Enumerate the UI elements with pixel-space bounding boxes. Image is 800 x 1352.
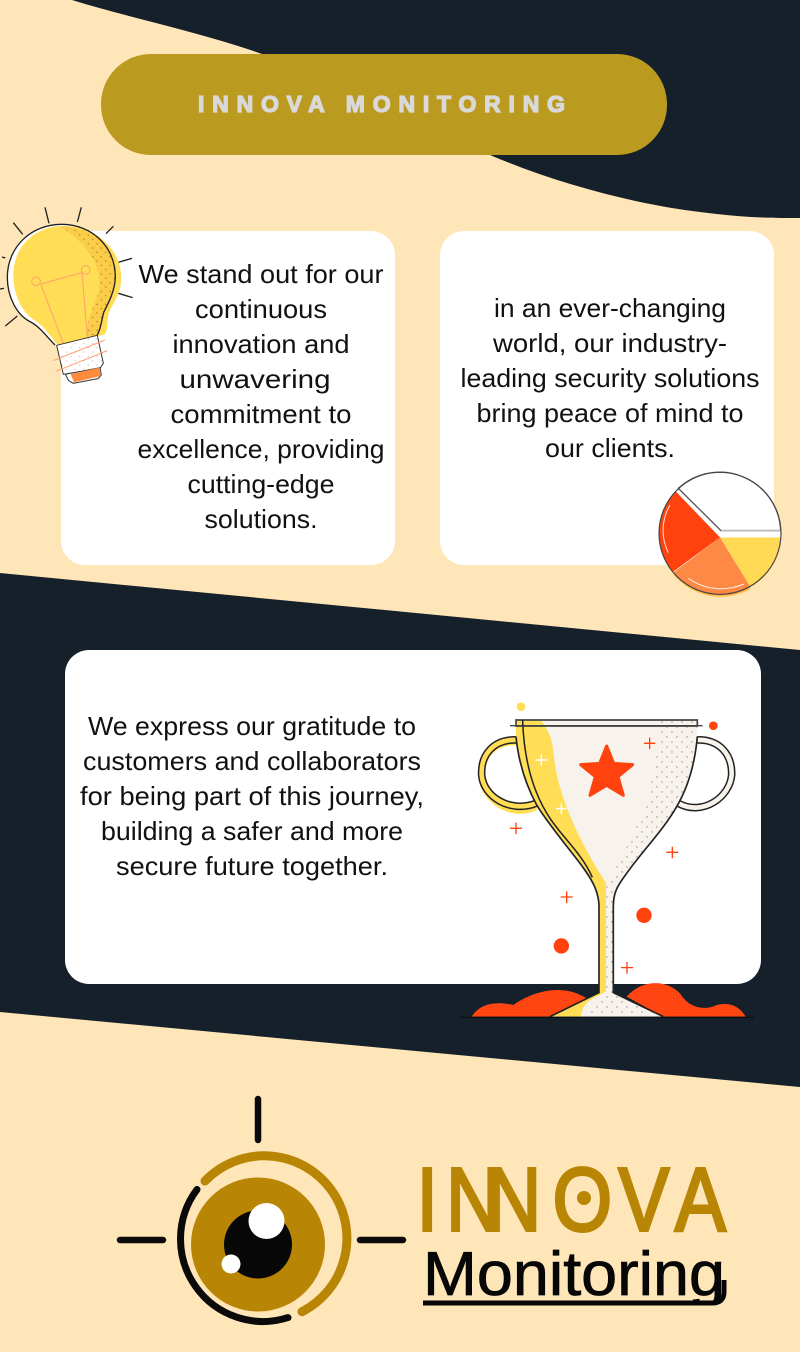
icon: light bulb: [0, 207, 133, 383]
text: security: bring peace of mind to: [476, 398, 744, 428]
text: innovation: unwavering: [180, 364, 330, 394]
text: security: our clients.: [545, 433, 675, 463]
text: gratitude: customers and collaborators: [83, 746, 421, 776]
title pill: INNOVA MONITORING: [198, 91, 565, 117]
text: innovation: We stand out for our: [138, 259, 384, 289]
sub-icon: star: [581, 746, 633, 795]
text: innovation: cutting-edge: [188, 469, 334, 499]
text: security: leading security solutions: [460, 363, 760, 393]
text: gratitude: [80, 711, 424, 881]
text: innovation: [138, 259, 384, 534]
text: innovation: excellence, providing: [138, 434, 384, 464]
text: gratitude: We express our gratitude to: [88, 711, 416, 741]
title pill: [101, 54, 667, 155]
icon: pie chart: [659, 472, 781, 597]
sub-icon: cup body: [516, 720, 697, 1017]
text: innovation: commitment to: [170, 399, 352, 429]
text: innovation: solutions.: [204, 504, 318, 534]
logo: Monitoring wordmark: Monitoring: [423, 1240, 725, 1309]
sub-icon: handles: [482, 740, 732, 810]
dark diagonal band: [0, 573, 800, 1087]
panel: innovation card: [61, 231, 395, 565]
text: gratitude: secure future together.: [116, 851, 388, 881]
text: security: world, our industry-: [492, 328, 727, 358]
text: innovation: continuous: [195, 294, 327, 324]
top-right dark wave: [72, 0, 800, 218]
sub-icon: ground blobs: [472, 983, 746, 1017]
sub-icon: confetti: [510, 702, 718, 974]
text: innovation: innovation and: [172, 329, 350, 359]
logo: eye mark: [120, 1099, 403, 1321]
panel: gratitude card: [65, 650, 761, 984]
text: gratitude: for being part of this journey,: [80, 781, 424, 811]
icon: trophy: [459, 702, 754, 1017]
logo: INNOVA wordmark: INNOVA: [417, 1149, 726, 1250]
text: security: [460, 293, 760, 463]
text: security: in an ever-changing: [494, 293, 726, 323]
panel: security card: [440, 231, 774, 565]
text: gratitude: building a safer and more: [101, 816, 403, 846]
